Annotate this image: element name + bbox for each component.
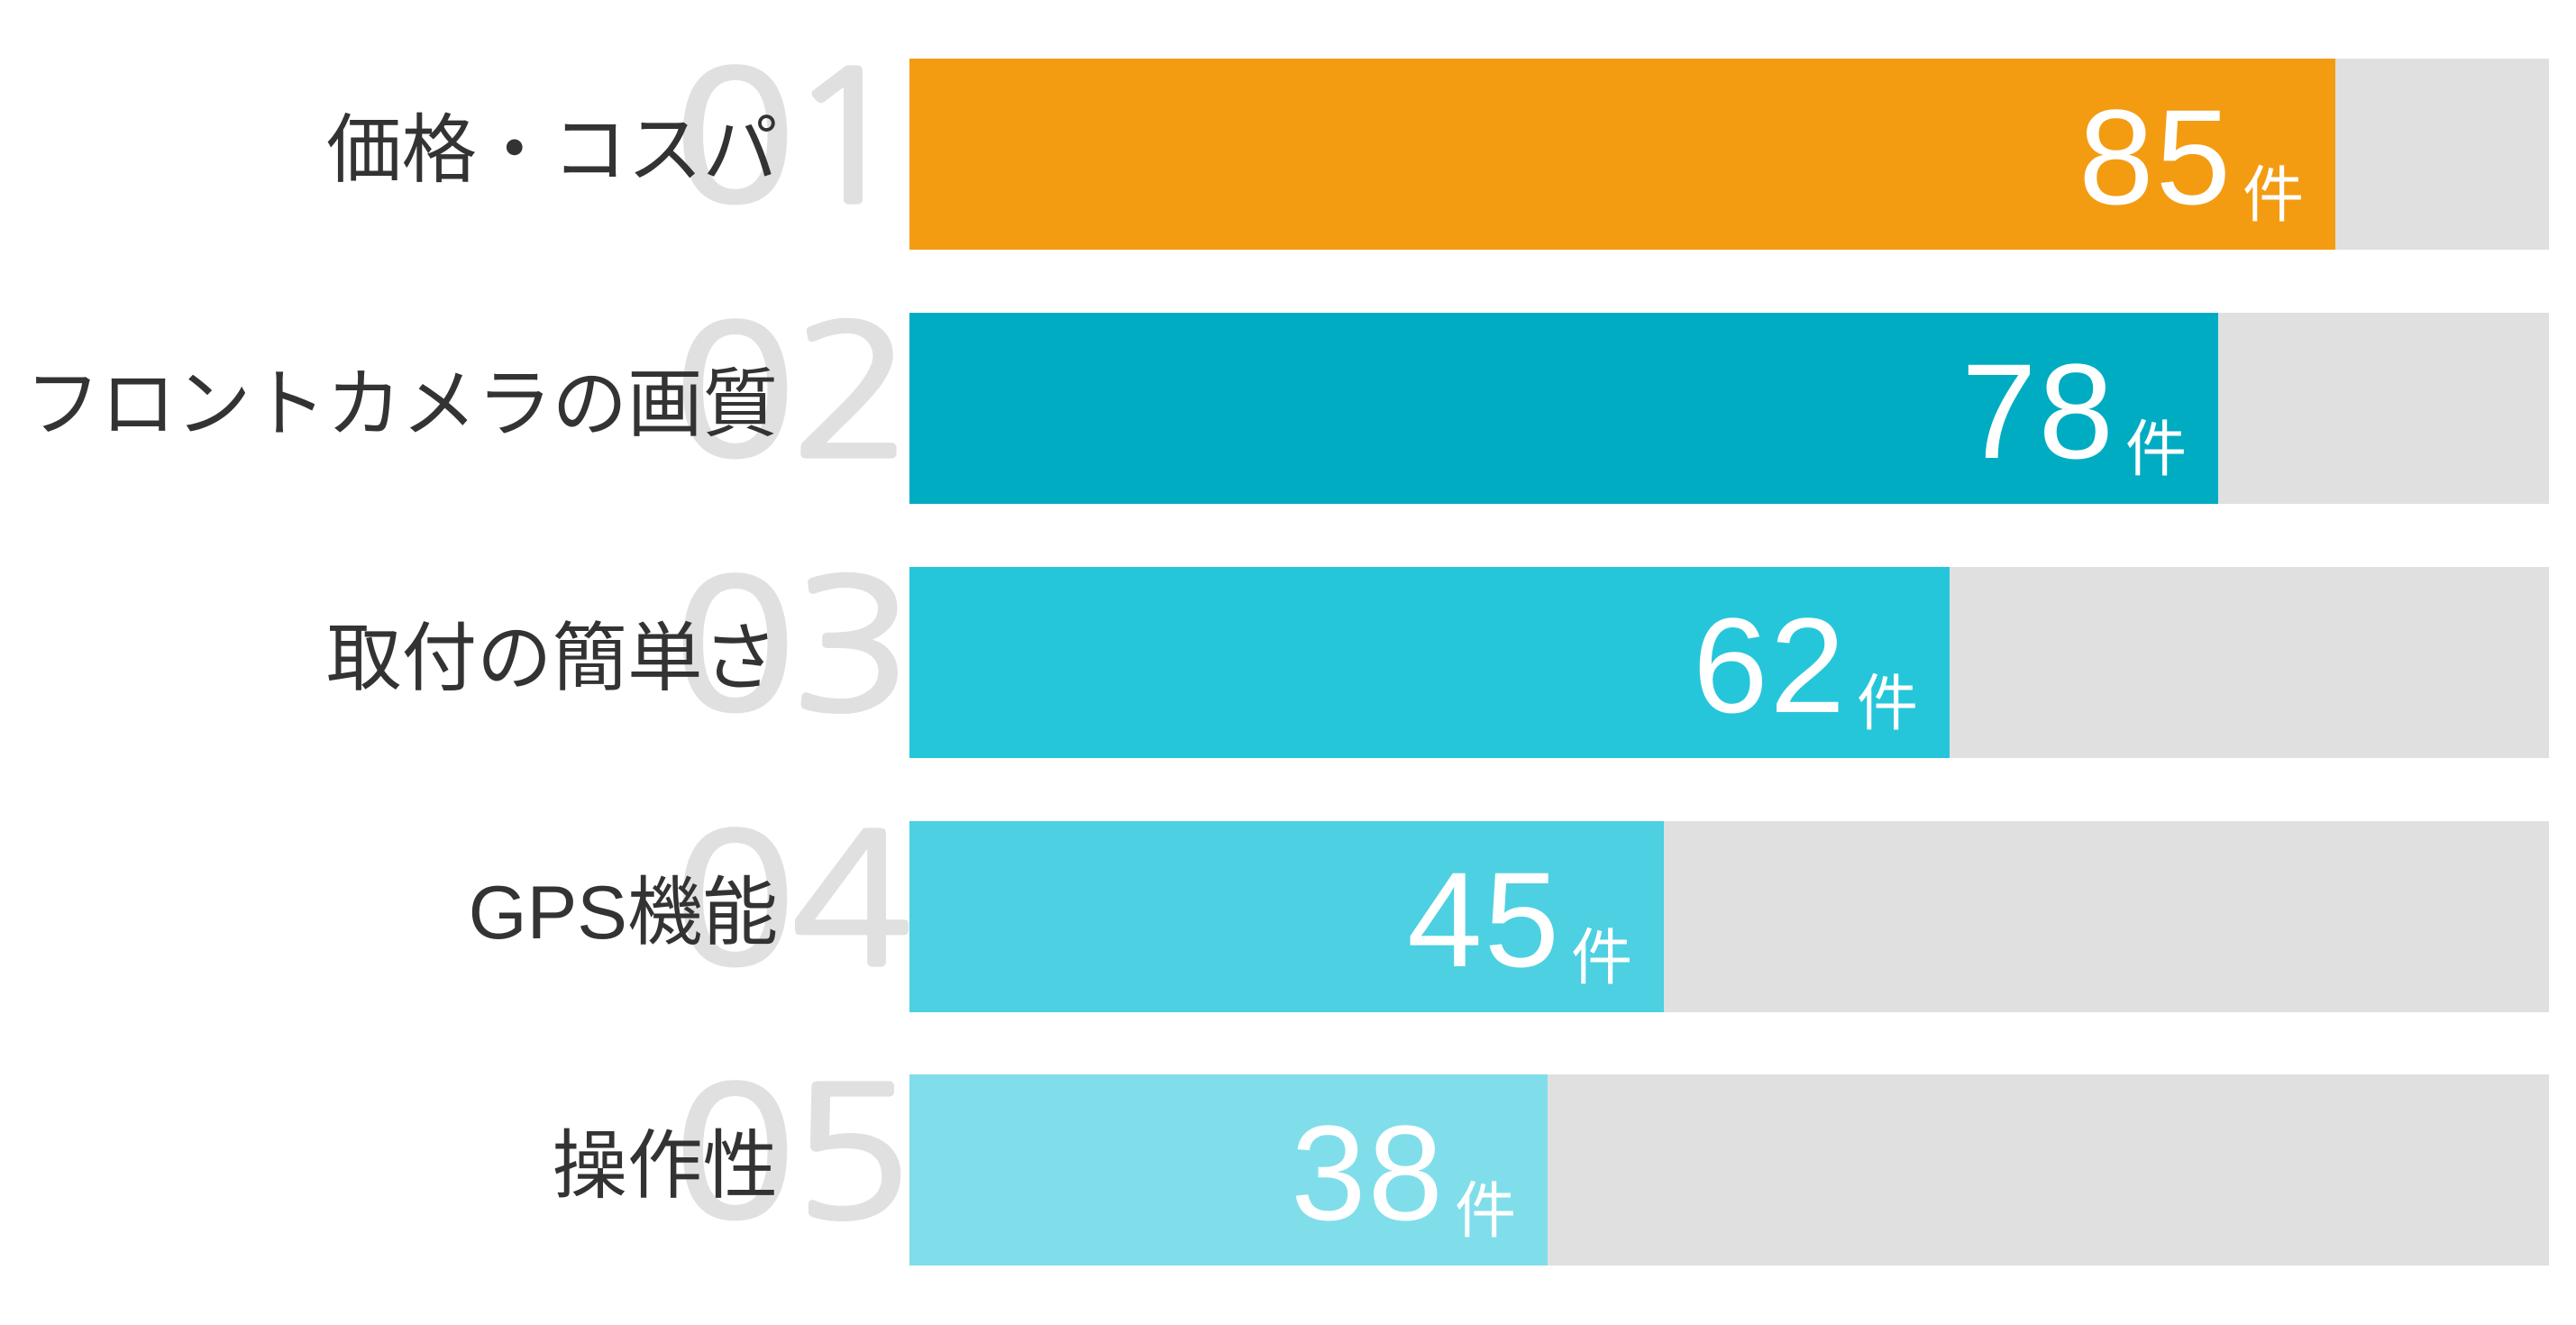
- bar value fill: [909, 821, 1664, 1012]
- category label: フロントカメラの画質: [25, 361, 778, 446]
- value 38: 38: [1291, 1097, 1445, 1248]
- rank number 03: 03: [673, 555, 908, 736]
- category label: GPS機能: [469, 870, 778, 955]
- unit: 件: [1455, 1161, 1516, 1250]
- bar value fill: [909, 567, 1950, 758]
- value 45: 45: [1407, 844, 1561, 995]
- bar value fill: [909, 1074, 1548, 1266]
- bar value fill: [909, 59, 2335, 250]
- rank number 04: 04: [673, 809, 908, 991]
- bar value fill: [909, 313, 2218, 504]
- category label: 価格・コスパ: [326, 107, 778, 192]
- bar track: [909, 313, 2549, 504]
- unit: 件: [2125, 399, 2187, 489]
- rank number 05: 05: [673, 1063, 908, 1244]
- value 85: 85: [2078, 81, 2233, 233]
- bar track: [909, 821, 2549, 1012]
- bar track: [909, 59, 2549, 250]
- value 62: 62: [1693, 589, 1847, 741]
- category label: 取付の簡単さ: [326, 616, 778, 700]
- row 4: GPS function: [469, 809, 2549, 1012]
- unit: 件: [1857, 653, 1918, 743]
- rank number 01: 01: [673, 47, 898, 228]
- category label: 操作性: [552, 1123, 778, 1208]
- value 78: 78: [1961, 335, 2115, 487]
- unit: 件: [2243, 145, 2304, 234]
- row 5: operability: [552, 1063, 2549, 1266]
- bar track: [909, 1074, 2549, 1266]
- unit: 件: [1571, 908, 1632, 997]
- row 1: price and value: [326, 47, 2549, 250]
- rank number 02: 02: [673, 301, 908, 482]
- row 3: ease of installation: [326, 555, 2549, 758]
- bar track: [909, 567, 2549, 758]
- row 2: front camera image quality: [25, 301, 2549, 504]
